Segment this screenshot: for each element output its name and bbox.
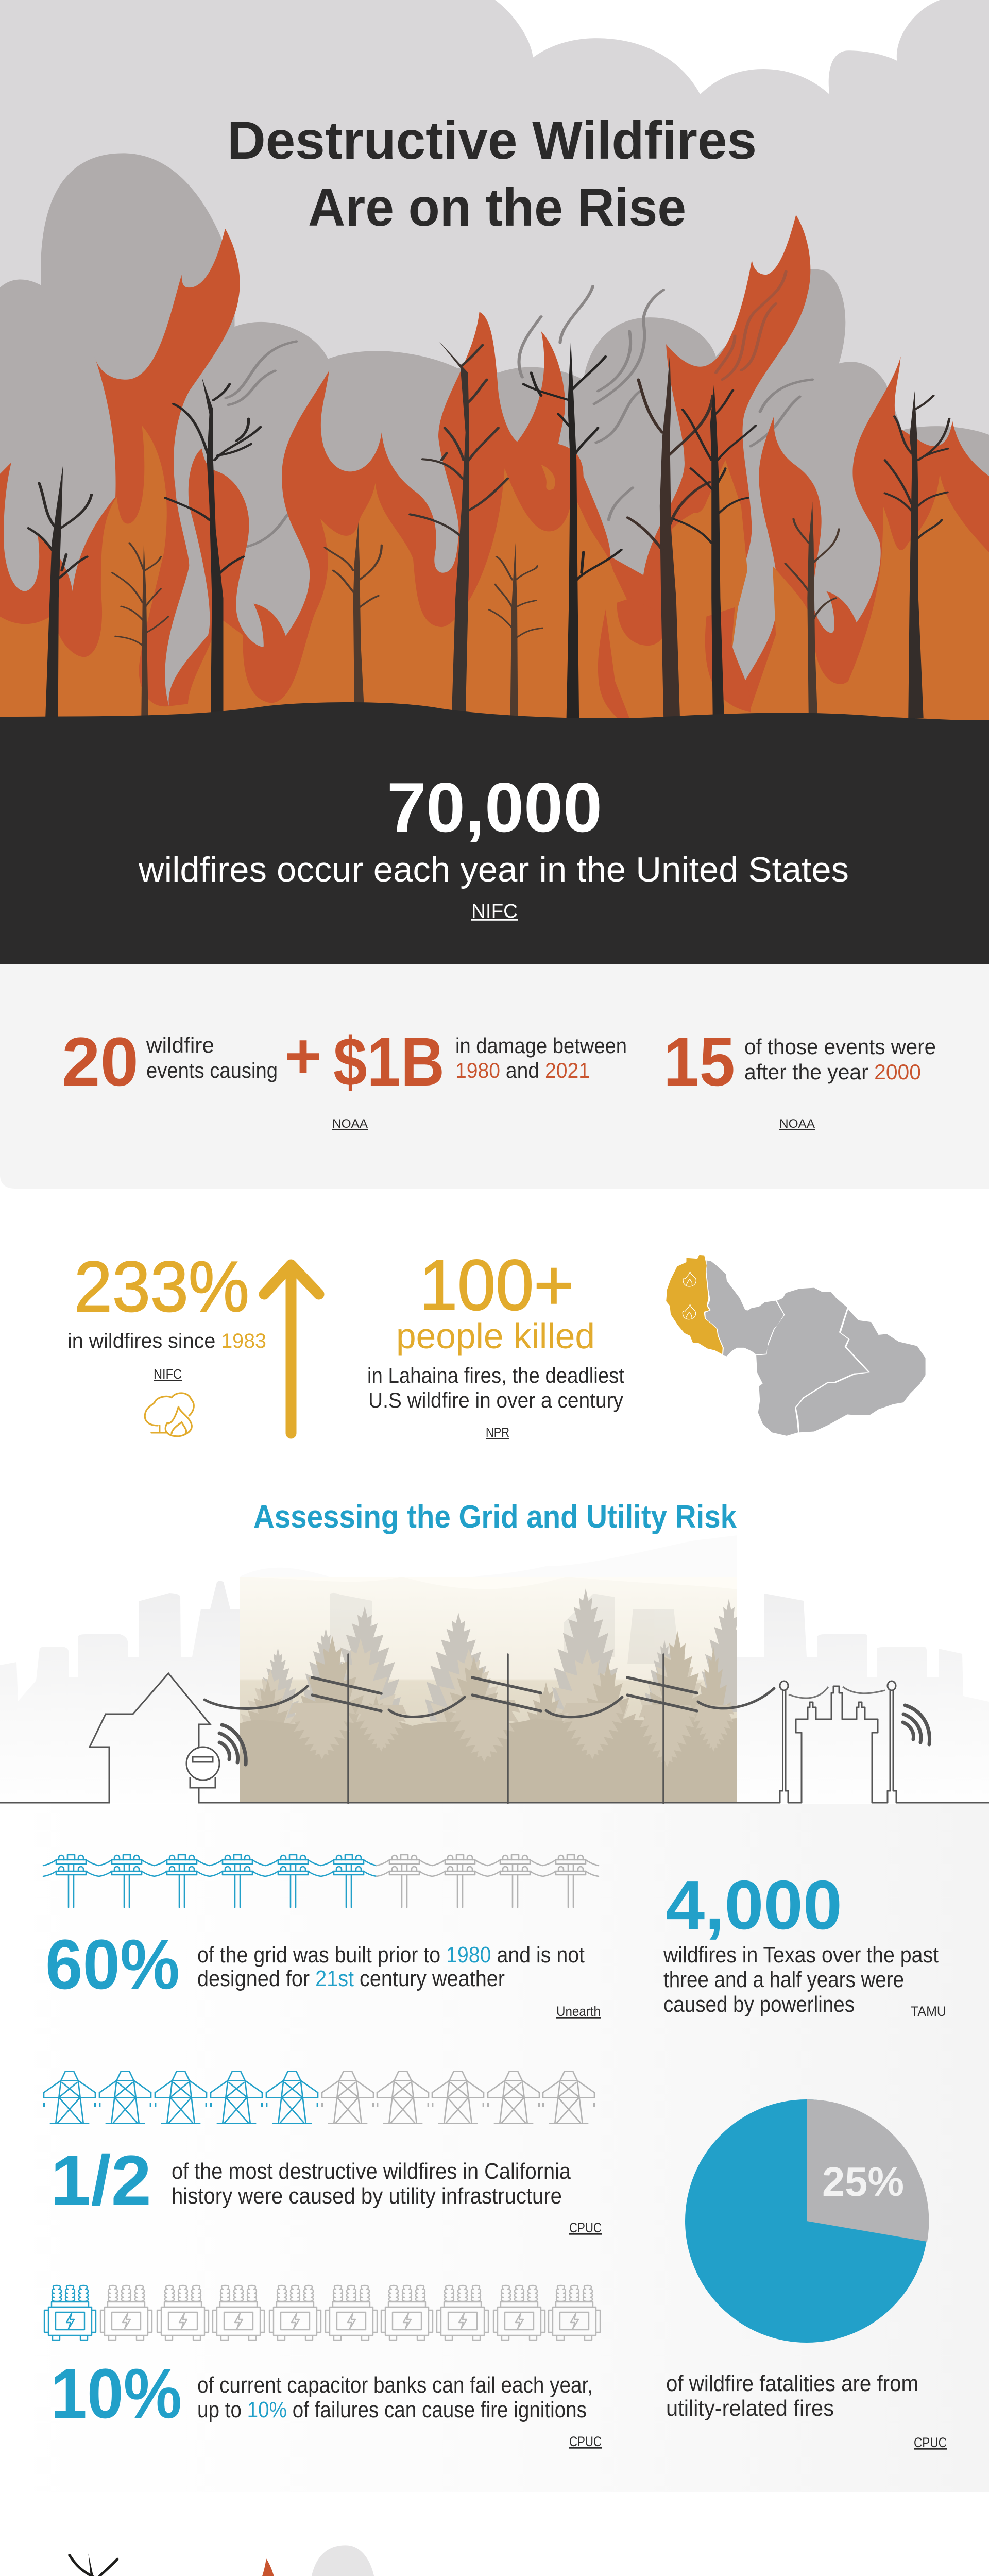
- city skyline: [0, 1581, 989, 1803]
- tree 9: [674, 384, 756, 718]
- tree 11: [885, 391, 949, 718]
- tree 1: [28, 465, 92, 718]
- stat: 10% capacitor failures: up to 10% of failures can cause fire ignitions: [197, 2397, 587, 2422]
- fire icons: [683, 1272, 696, 1319]
- stat: 4,000 Texas wildfires: 4,000: [666, 1866, 842, 1944]
- stat: 100+ people killed: NPR: [486, 1425, 509, 1440]
- panel: grid statistics: [0, 1804, 989, 2492]
- tree 2: [112, 540, 168, 718]
- stat: 4,000 Texas wildfires: TAMU: [911, 2004, 946, 2019]
- 20 events: events causing: [146, 1058, 278, 1082]
- stat: 233% increase: NIFC: [154, 1366, 182, 1382]
- pie chart: 25%: [685, 2099, 929, 2343]
- tree 7: [523, 341, 621, 718]
- stat: 1/2 of wildfires: history were caused by utility infrastructure: [172, 2183, 562, 2209]
- tree 5: [410, 341, 508, 718]
- hero illustration: wildfire forest: [0, 0, 989, 721]
- red flames: [0, 215, 989, 721]
- tree 3: [165, 377, 261, 718]
- pine forest layers: [227, 1588, 757, 1806]
- map: Maui with Lahaina highlighted: [666, 1255, 926, 1436]
- stat: 60% of grid: Unearth: [556, 2004, 601, 2019]
- utility poles and wires: [204, 1654, 774, 1803]
- stat: 1/2 of wildfires: 1/2: [50, 2141, 151, 2220]
- red flames: [21, 2558, 587, 2576]
- 20 events: wildfire: [146, 1033, 214, 1057]
- stat label: wildfires occur each year in the United States: [138, 850, 849, 889]
- pie caption: utility-related fires: [666, 2396, 834, 2421]
- pie chart: 25%: 25%: [822, 2159, 904, 2205]
- wifi signal: house: [219, 1725, 246, 1765]
- skyline through haze: [330, 1593, 680, 1664]
- source: NIFC: [471, 901, 518, 922]
- tree 4: [325, 522, 382, 718]
- forest backdrop: [240, 1535, 737, 1584]
- smoke: [0, 2545, 595, 2576]
- plus sign: +: [284, 1021, 322, 1092]
- stat: 10% capacitor failures: CPUC: [569, 2434, 602, 2449]
- front pines: [248, 1631, 731, 1724]
- 15 events: NOAA: [779, 1117, 815, 1131]
- stat: 4,000 Texas wildfires: [663, 1866, 946, 2019]
- arrow: upward trend: [264, 1265, 319, 1433]
- stat: 100+ people killed: in Lahaina fires, the deadliest: [367, 1363, 624, 1387]
- rear pines: [256, 1588, 757, 1730]
- tree 10: [786, 501, 839, 718]
- stat: 1/2 of wildfires: of the most destructive wildfires in California: [172, 2159, 571, 2184]
- pie caption: of wildfire fatalities are from: [666, 2371, 918, 2396]
- red flame patches: [598, 483, 751, 721]
- heading: grid and utility risk: Assessing the Grid and Utility Risk: [253, 1499, 737, 1535]
- title: Destructive Wildfires: [227, 111, 757, 171]
- 20 events: [62, 1024, 278, 1100]
- stat: 4,000 Texas wildfires: wildfires in Texas over the past: [663, 1942, 939, 1968]
- stat: 233% increase: in wildfires since 1983: [67, 1330, 266, 1352]
- light smoke cloud: [0, 0, 989, 721]
- flame wisps: [716, 272, 786, 380]
- stat: 60% of grid: [45, 1925, 601, 2019]
- orange flames: [0, 426, 989, 721]
- panel: billion-dollar events: [0, 964, 989, 1189]
- panel: 70,000 wildfires dark band: [0, 720, 989, 964]
- title: Are on the Rise: [308, 178, 686, 238]
- wifi signal: substation: [903, 1705, 930, 1744]
- stat: 60% of grid: of the grid was built prior to 1980 and is not: [197, 1942, 585, 1968]
- hanging pale tree shapes: [288, 1700, 734, 1767]
- stat: 233% increase: 233%: [74, 1247, 249, 1327]
- standing burned tree: [42, 2553, 147, 2576]
- stat: 233% increase: [67, 1247, 266, 1382]
- title: [227, 111, 757, 238]
- 15 events: 15: [663, 1024, 735, 1100]
- icon row: capacitor banks: [44, 2285, 600, 2340]
- pie caption: [666, 2371, 947, 2450]
- tree 6: [489, 543, 542, 718]
- stat: 4,000 Texas wildfires: caused by powerlines: [663, 1992, 855, 2017]
- stat: 100+ people killed: [367, 1245, 624, 1440]
- stat: 1/2 of wildfires: [50, 2141, 602, 2235]
- 15 events: after the year 2000: [744, 1060, 921, 1084]
- burned trees: [28, 341, 949, 718]
- stat: 10% capacitor failures: of current capacitor banks can fail each year,: [197, 2372, 593, 2398]
- icon: tree on fire: [145, 1393, 194, 1436]
- 15 events: [663, 1024, 936, 1131]
- mid pines: [241, 1639, 736, 1724]
- stat: 1/2 of wildfires: CPUC: [569, 2220, 602, 2235]
- stat number: 70,000: [387, 768, 602, 846]
- smoke wisps: [226, 286, 812, 547]
- stat: 10% capacitor failures: 10%: [50, 2354, 182, 2433]
- dark smoke: [0, 153, 989, 721]
- scorched ground: [0, 702, 989, 721]
- stat: 10% capacitor failures: [50, 2354, 602, 2449]
- tree 8: [627, 354, 713, 718]
- house with smart meter: [0, 1673, 240, 1803]
- stat: 100+ people killed: people killed: [396, 1316, 595, 1356]
- 15 events: of those events were: [744, 1035, 936, 1059]
- substation: [240, 1681, 989, 1803]
- $1B damage: NOAA: [332, 1117, 368, 1131]
- stat: 100+ people killed: U.S wildfire in over a century: [368, 1388, 623, 1412]
- scene: city, forest and power lines: [0, 1577, 989, 1804]
- stat: 4,000 Texas wildfires: three and a half years were: [663, 1967, 904, 1992]
- icon row: utility poles: [43, 1855, 599, 1907]
- pie caption: CPUC: [914, 2435, 947, 2450]
- forest ground: [240, 1718, 737, 1803]
- $1B damage: 1980 and 2021: [455, 1058, 590, 1082]
- stat: 100+ people killed: 100+: [419, 1245, 574, 1325]
- 20 events: 20: [62, 1024, 139, 1100]
- $1B damage: $1B: [333, 1024, 445, 1100]
- $1B damage: [332, 1024, 627, 1131]
- icon row: transmission towers: [44, 2072, 594, 2124]
- Lahaina region: [666, 1255, 723, 1354]
- stat: 60% of grid: designed for 21st century weather: [197, 1966, 505, 1991]
- $1B damage: in damage between: [455, 1033, 627, 1058]
- stat: 60% of grid: 60%: [45, 1925, 180, 2004]
- illustration: burning trees: [0, 2545, 595, 2576]
- orange dab: [541, 465, 555, 490]
